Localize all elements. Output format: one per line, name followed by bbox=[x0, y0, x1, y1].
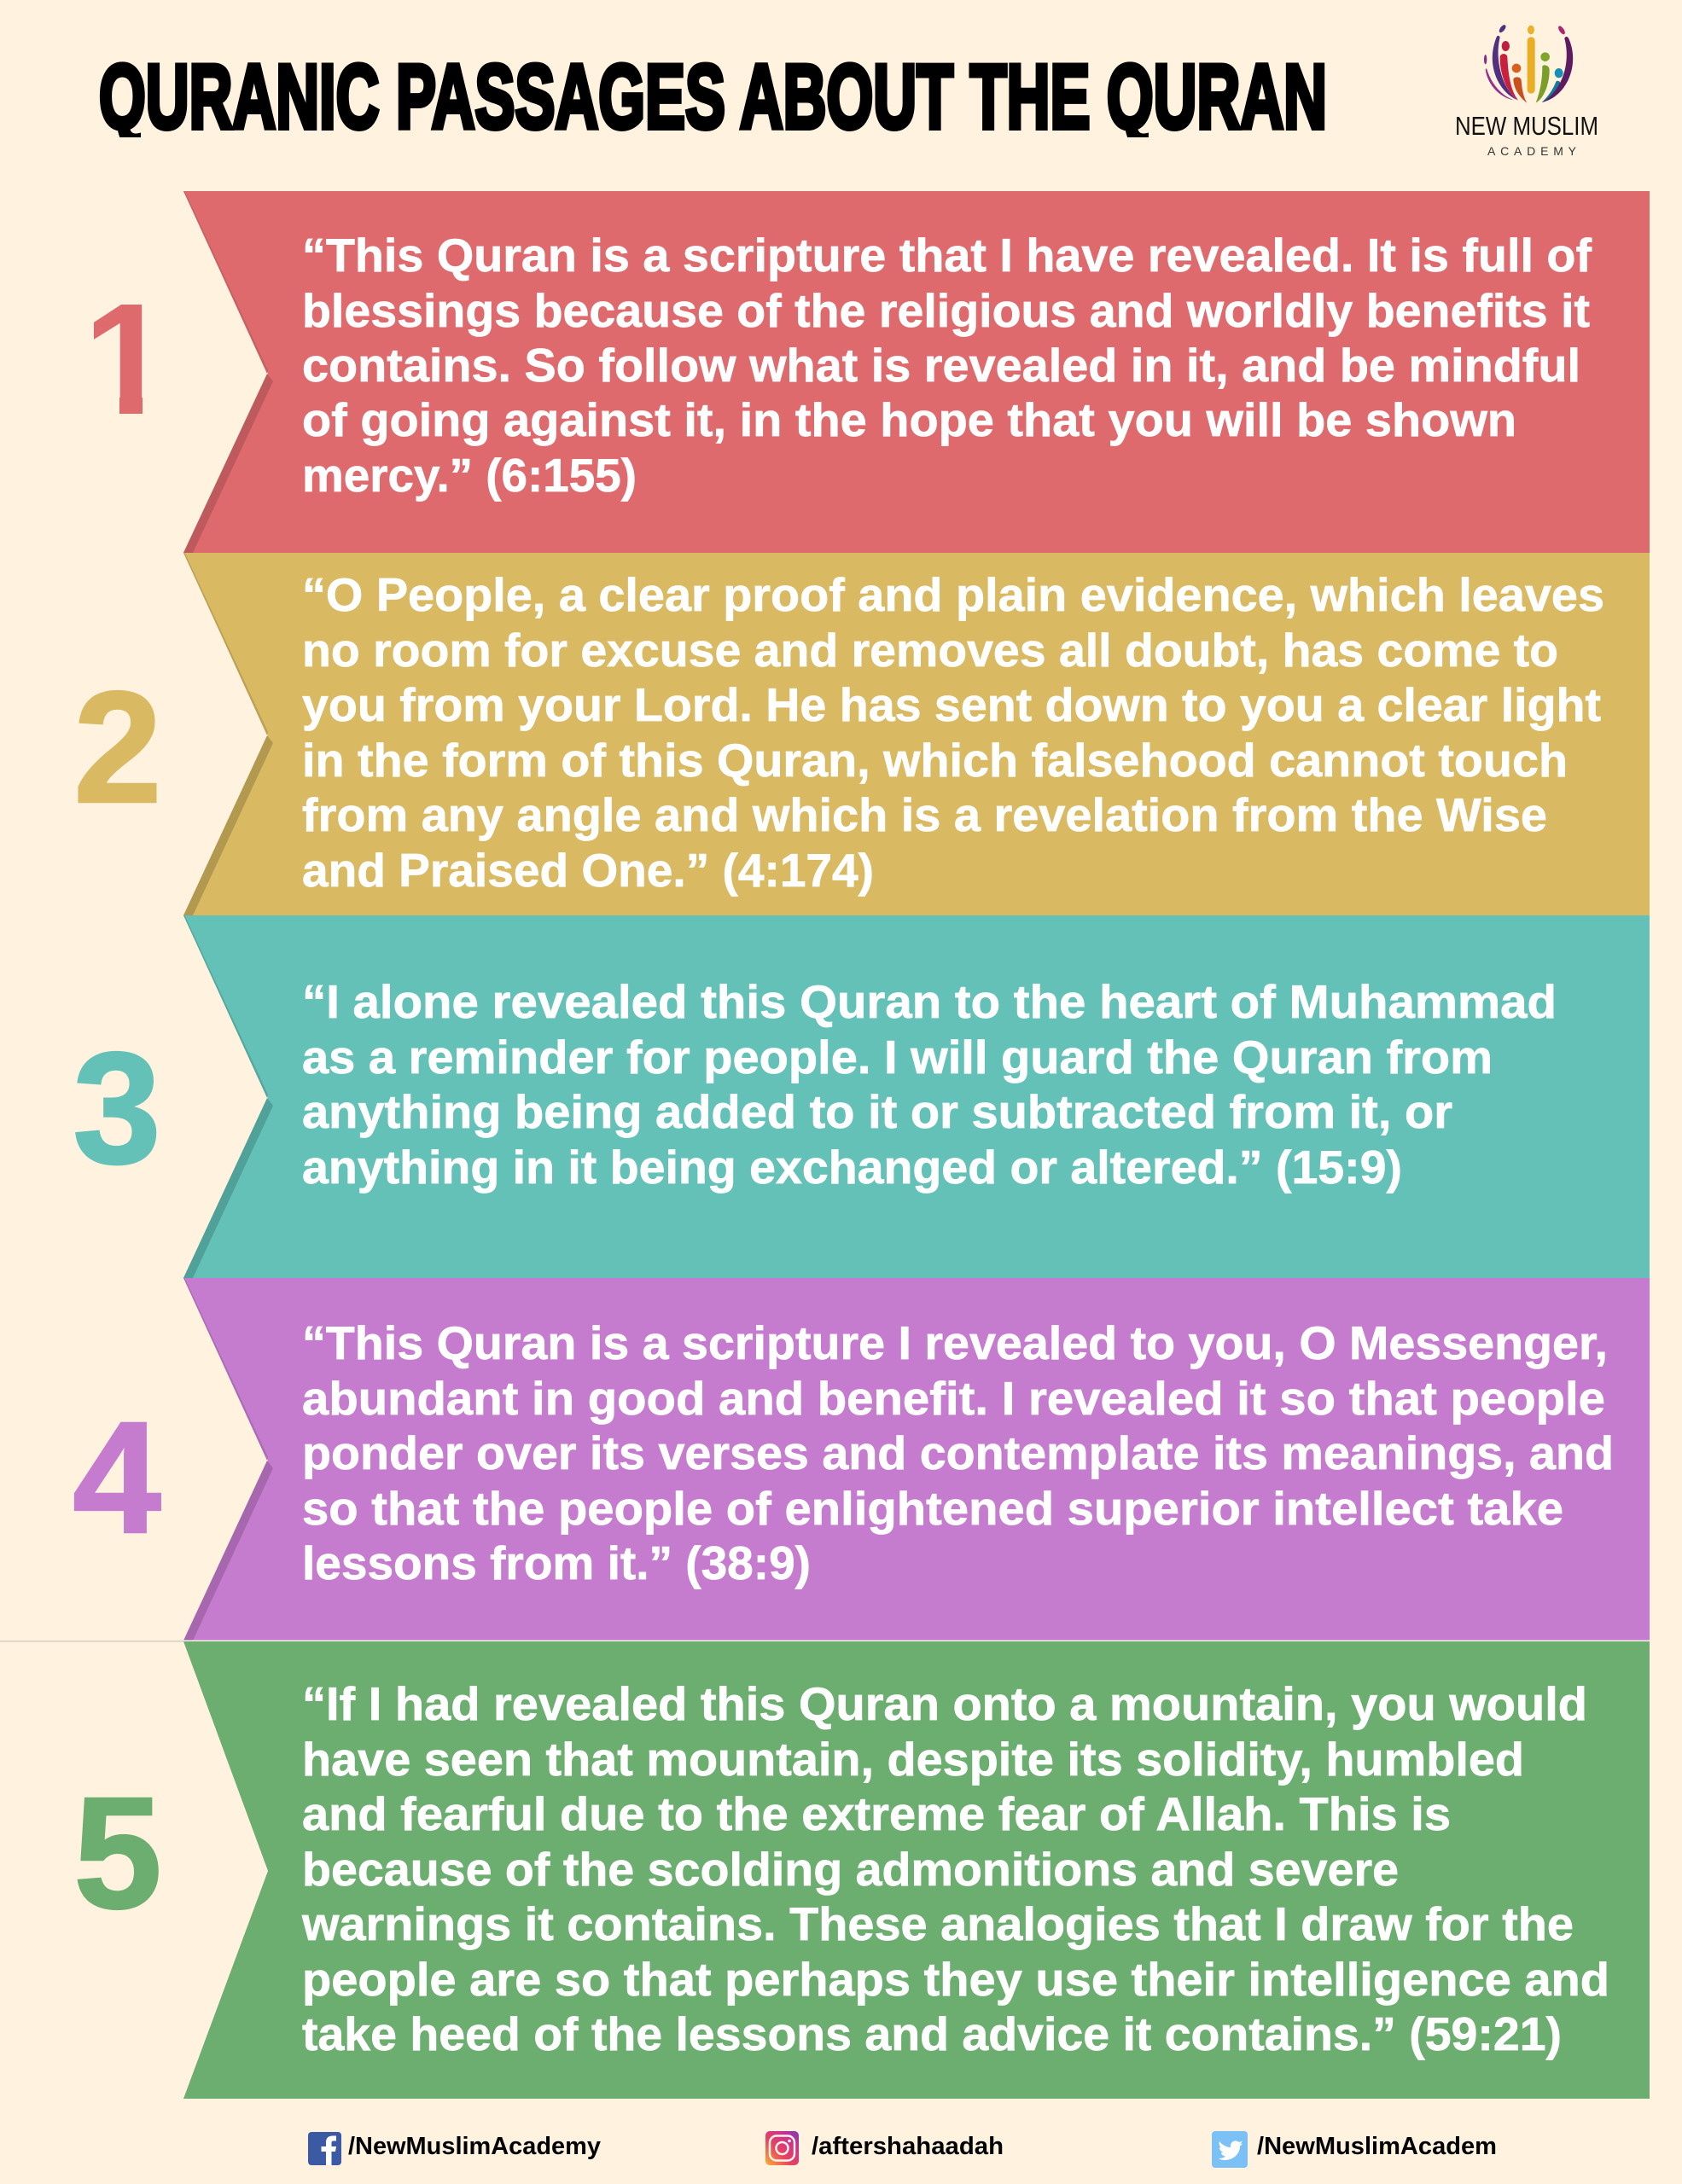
passage text: mercy.” (6:155) bbox=[302, 449, 637, 502]
passage text: “This Quran is a scripture that I have revealed. It is full of bbox=[302, 229, 1592, 282]
passage text: people are so that perhaps they use their intelligence and bbox=[302, 1953, 1609, 2006]
banner shape bbox=[183, 191, 1650, 553]
number: 3 bbox=[73, 1020, 161, 1197]
facebook handle: /NewMuslimAcademy bbox=[348, 2133, 601, 2160]
passage text: “If I had revealed this Quran onto a mountain, you would bbox=[302, 1677, 1587, 1730]
passage text: ponder over its verses and contemplate its meanings, and bbox=[302, 1426, 1614, 1479]
banner shape bbox=[183, 915, 1650, 1278]
passage text: of going against it, in the hope that you will be shown bbox=[302, 393, 1516, 446]
passage text: contains. So follow what is revealed in it, and be mindful bbox=[302, 339, 1580, 392]
panel 4 bbox=[73, 1278, 1650, 1641]
passage text: “This Quran is a scripture I revealed to you, O Messenger, bbox=[302, 1316, 1608, 1369]
passage text: take heed of the lessons and advice it contains.” (59:21) bbox=[302, 2007, 1562, 2060]
passage text: blessings because of the religious and worldly benefits it bbox=[302, 284, 1590, 337]
passage text: “O People, a clear proof and plain evidence, which leaves bbox=[302, 568, 1604, 621]
panel 1 bbox=[83, 191, 1650, 553]
icon: logo figures bbox=[1484, 24, 1573, 103]
passage text: as a reminder for people. I will guard the Quran from bbox=[302, 1031, 1493, 1083]
passage text: and fearful due to the extreme fear of Allah. This is bbox=[302, 1787, 1451, 1840]
panel 2 bbox=[73, 553, 1650, 915]
passage text: and Praised One.” (4:174) bbox=[302, 844, 874, 897]
footer: social links bbox=[308, 2131, 1497, 2168]
passage text: no room for excuse and removes all doubt, has come to bbox=[302, 624, 1558, 677]
number: 1 bbox=[83, 271, 172, 448]
passage text: so that the people of enlightened superior intellect take bbox=[302, 1482, 1563, 1535]
passage text: because of the scolding admonitions and severe bbox=[302, 1843, 1399, 1896]
passage text: anything in it being exchanged or altered.” (15:9) bbox=[302, 1141, 1402, 1194]
banner shape bbox=[183, 1641, 1650, 2099]
passage text bbox=[302, 975, 1557, 1194]
icon: twitter bbox=[1212, 2131, 1248, 2168]
passage text: warnings it contains. These analogies that I draw for the bbox=[301, 1897, 1574, 1950]
passage text: “I alone revealed this Quran to the heart of Muhammad bbox=[302, 975, 1557, 1028]
passage text: have seen that mountain, despite its solidity, humbled bbox=[302, 1733, 1524, 1786]
passage text: you from your Lord. He has sent down to you a clear light bbox=[302, 678, 1601, 731]
icon: instagram bbox=[765, 2131, 799, 2165]
instagram handle: /aftershahaadah bbox=[812, 2133, 1004, 2160]
panel 3 bbox=[73, 915, 1650, 1278]
banner shape bbox=[183, 553, 1650, 915]
panel 5 bbox=[73, 1641, 1650, 2099]
number: 4 bbox=[73, 1390, 161, 1566]
logo: New Muslim Academy bbox=[1455, 24, 1598, 158]
passage text: anything being added to it or subtracted from it, or bbox=[302, 1085, 1452, 1138]
passage text bbox=[302, 229, 1592, 502]
passage text bbox=[302, 1316, 1614, 1589]
logo subtitle: ACADEMY bbox=[1487, 144, 1577, 158]
passage text: from any angle and which is a revelation from the Wise bbox=[302, 788, 1547, 841]
passage text bbox=[302, 568, 1604, 897]
passage text: abundant in good and benefit. I revealed it so that people bbox=[302, 1372, 1605, 1425]
logo wordmark: NEW MUSLIM bbox=[1455, 111, 1598, 141]
passage text: in the form of this Quran, which falsehood cannot touch bbox=[302, 734, 1568, 787]
passage text bbox=[301, 1677, 1609, 2060]
twitter handle: /NewMuslimAcadem bbox=[1257, 2133, 1497, 2160]
passage text: lessons from it.” (38:9) bbox=[302, 1536, 811, 1589]
number: 5 bbox=[73, 1765, 162, 1942]
banner shape bbox=[183, 1278, 1650, 1641]
icon: facebook bbox=[308, 2132, 341, 2165]
number: 2 bbox=[73, 659, 162, 836]
